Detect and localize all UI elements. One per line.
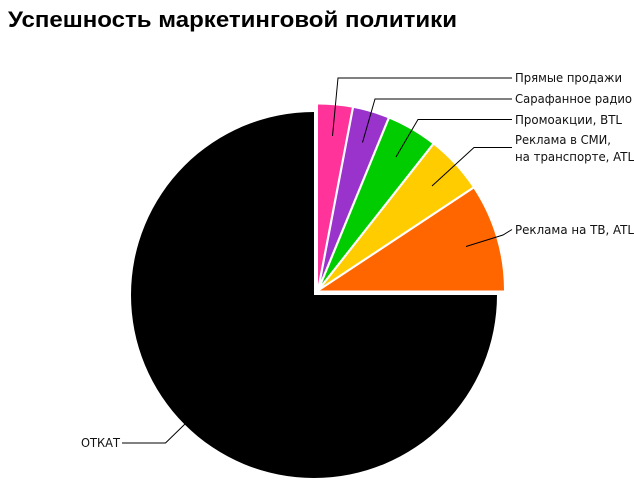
slice: Реклама в СМИ, на транспорте, ATL	[318, 144, 473, 290]
label: Реклама в СМИ, на транспорте, ATL	[432, 133, 634, 186]
label: Промоакции, BTL	[396, 113, 622, 157]
label: Реклама в СМИ, на транспорте, ATL: на транспорте, ATL	[515, 150, 634, 164]
slice: Сарафанное радио	[318, 108, 389, 290]
slice: Промоакции, BTL	[318, 118, 433, 291]
slice: Прямые продажи	[318, 104, 353, 290]
slice: Реклама на ТВ, ATL	[318, 188, 504, 290]
label: Реклама в СМИ, на транспорте, ATL: Реклама в СМИ,	[515, 133, 611, 147]
pie chart	[131, 104, 504, 478]
label: ОТКАТ: ОТКАТ	[81, 436, 121, 450]
label: ОТКАТ	[81, 424, 185, 450]
label: Сарафанное радио	[362, 92, 632, 142]
title: Успешность маркетинговой политики	[8, 7, 457, 32]
label: Реклама на ТВ, ATL: Реклама на ТВ, ATL	[515, 223, 634, 237]
label: Реклама на ТВ, ATL	[466, 223, 634, 246]
label: Промоакции, BTL: Промоакции, BTL	[515, 113, 622, 127]
label: Прямые продажи	[332, 71, 622, 136]
label: Сарафанное радио: Сарафанное радио	[515, 92, 632, 106]
label: Прямые продажи: Прямые продажи	[515, 71, 622, 85]
slice: ОТКАТ	[131, 112, 497, 478]
